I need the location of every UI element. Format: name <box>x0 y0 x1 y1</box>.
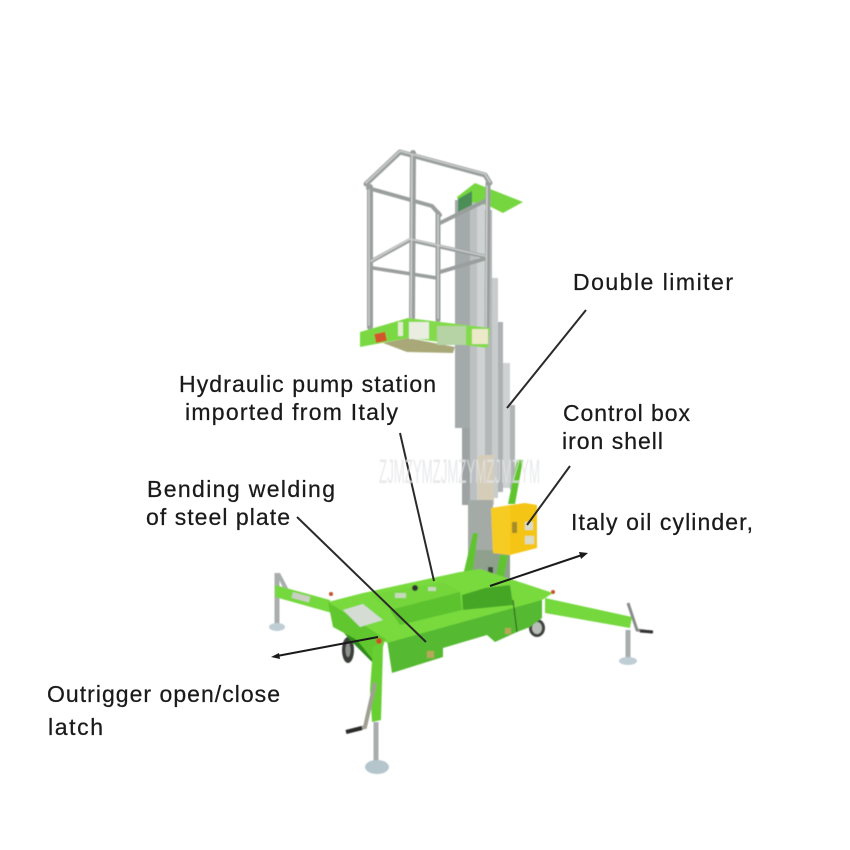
label: hydraulic pump station: Hydraulic pump station <box>179 371 436 397</box>
top green plate <box>457 183 523 213</box>
left outrigger and leg <box>269 573 332 631</box>
pointer: hydraulic pump station <box>400 433 434 581</box>
pointer: double limiter <box>507 310 586 408</box>
silver warning plate <box>343 604 383 627</box>
base underside shadow <box>333 620 378 668</box>
oil cylinder <box>488 567 493 604</box>
base top surface <box>328 569 553 643</box>
pump cover front <box>390 592 462 625</box>
label: control box iron shell: iron shell <box>562 428 663 454</box>
label: control box iron shell: Control box <box>563 400 690 426</box>
right outrigger and leg <box>545 598 653 665</box>
guard rail highlights <box>366 151 490 328</box>
mast head shadow <box>458 191 472 212</box>
product: aerial work platform lift <box>269 151 653 774</box>
label: outrigger open/close latch: latch <box>48 714 103 740</box>
cable <box>513 600 517 632</box>
label: hydraulic pump station: imported from Italy <box>185 399 398 425</box>
label: italy oil cylinder: Italy oil cylinder, <box>571 509 753 535</box>
control knob and plates <box>395 585 436 598</box>
label: bending welding of steel plate: Bending welding <box>147 476 335 502</box>
label: double limiter: Double limiter <box>573 269 733 295</box>
label: bending welding of steel plate <box>146 476 335 530</box>
pointer: control box <box>527 466 570 525</box>
label: outrigger open/close latch <box>47 681 280 740</box>
left end panel <box>328 602 387 660</box>
red limit buttons <box>329 590 555 644</box>
base front face <box>387 597 542 673</box>
base plates <box>427 628 511 658</box>
label: outrigger open/close latch: Outrigger open/close <box>47 681 280 707</box>
label: bending welding of steel plate: of steel plate <box>146 504 290 530</box>
arrow: outrigger latch <box>271 637 378 659</box>
mast well <box>462 585 513 610</box>
label: control box iron shell <box>562 400 690 454</box>
pointer: bending welding <box>297 517 426 642</box>
wheels <box>342 619 545 663</box>
green braces <box>461 460 523 603</box>
mast telescopic sections <box>455 200 515 600</box>
arrow: oil cylinder <box>490 552 588 586</box>
standing platform <box>360 318 490 353</box>
front outrigger and leg <box>346 640 389 774</box>
yellow control box <box>491 503 537 555</box>
pump cover top <box>370 582 460 610</box>
text: ZJMZYMZJMZYMZJMZYM <box>379 453 540 491</box>
platform guard rails <box>366 152 490 330</box>
label: hydraulic pump station <box>179 371 436 425</box>
